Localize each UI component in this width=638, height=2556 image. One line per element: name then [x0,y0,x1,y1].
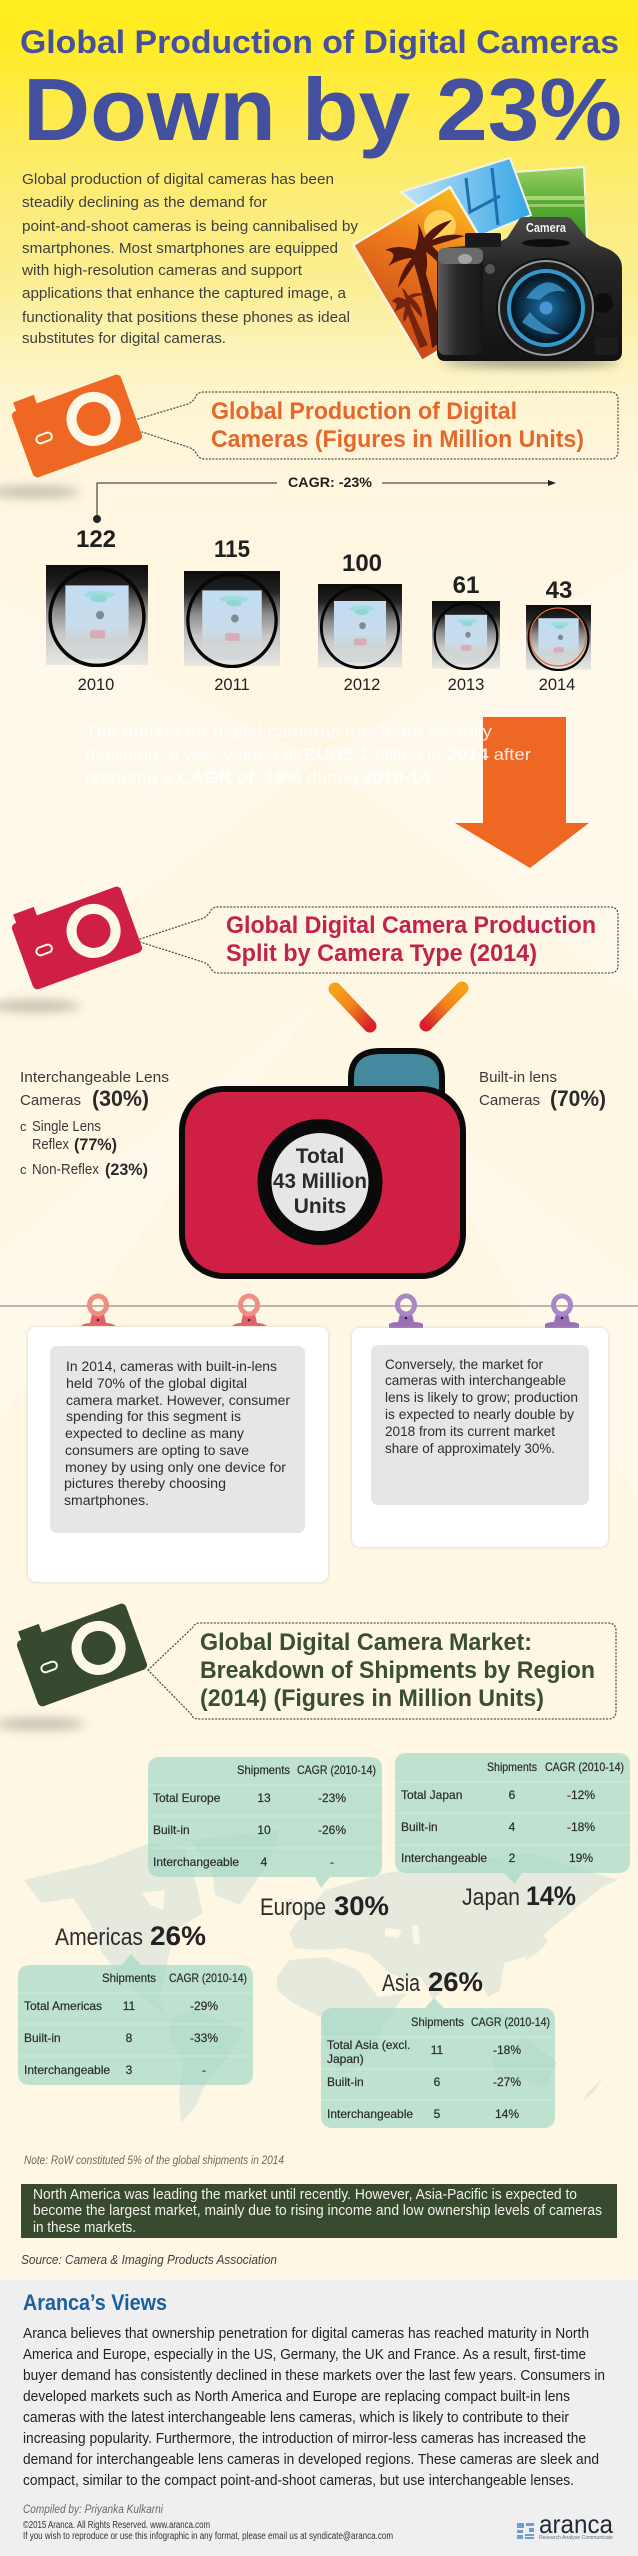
table: Japan: Built-in [401,1820,438,1834]
table: Europe: CAGR (2010-14) [297,1763,376,1777]
interchangeable lens label: (77%) [74,1136,117,1154]
intro paragraph [21,171,358,347]
bar chart: production by year [46,526,591,694]
illustration: photos and DSLR camera: Camera [526,220,567,235]
section 3 heading callout [148,1623,616,1719]
table: Europe: Shipments [237,1763,290,1777]
table: Japan: Total Japan [401,1788,462,1802]
table: Asia: -27% [493,2075,521,2089]
table: Europe: -26% [318,1823,346,1837]
2010 bar: 122 [76,526,116,553]
big orange down arrow [455,717,589,868]
dark green callout: become the largest market, mainly due to rising income and low ownership levels of cameras [33,2203,602,2219]
region label: Japan: Japan [462,1884,520,1911]
2014 bar [526,577,591,694]
Aranca's Views heading: Aranca’s Views [23,2290,167,2315]
table: Asia: CAGR (2010-14) [471,2015,550,2029]
dark green callout [21,2184,617,2238]
dark green callout: in these markets. [33,2220,136,2236]
camera graphic with total [182,1051,463,1276]
table: Asia: Interchangeable [327,2107,413,2121]
2013 bar: 2013 [448,676,484,694]
interchangeable lens label: Non-Reflex [32,1162,100,1178]
intro paragraph: smartphones. Most smartphones are equipped [22,240,338,257]
built-in lens label [479,1069,606,1111]
section 2 heading callout: Global Digital Camera Production [226,912,596,939]
section 1 heading callout: Cameras (Figures in Million Units) [211,426,584,453]
table: Japan: 4 [509,1820,516,1834]
table: Europe: 13 [257,1791,271,1805]
region label: Europe: Europe [260,1894,326,1921]
note card: interchangeable lens: is expected to nearly double by [385,1406,574,1422]
table: Americas: - [202,2063,206,2077]
note card: built-in lens: pictures thereby choosing [64,1475,226,1491]
2012 bar [318,550,402,694]
interchangeable lens label [20,1069,169,1179]
table: Europe: 10 [257,1823,271,1837]
note card: built-in lens: consumers are opting to save [65,1442,249,1458]
clips: pink [81,1296,267,1326]
aranca logo: Research Analyse Communicate [539,2535,613,2541]
table: Americas: -33% [190,2031,218,2045]
section 3 icon: green camera [0,1594,148,1730]
note card: built-in lens: money by using only one device for [65,1459,286,1475]
table: Japan: 6 [509,1788,516,1802]
table: Asia: Built-in [327,2075,364,2089]
source: Source: Camera & Imaging Products Association [21,2252,277,2267]
compiled by: Compiled by: Priyanka Kulkarni [23,2502,163,2516]
interchangeable lens label: Interchangeable Lens [20,1069,169,1086]
table: Asia: Total Asia (excl. [327,2038,410,2052]
table: Japan [395,1753,630,1884]
table: Asia: -18% [493,2043,521,2057]
table: Asia [321,1998,555,2128]
note card: built-in lens [28,1327,328,1582]
CAGR arrow: CAGR: -23% [288,474,373,490]
table: Americas: 3 [126,2063,133,2077]
intro paragraph: with high-resolution cameras and support [21,262,303,279]
title: Down by 23% [23,60,622,159]
table: Japan: Shipments [487,1760,537,1774]
section 1 heading callout: Global Production of Digital [211,398,517,425]
note card: built-in lens: held 70% of the global digital [66,1375,247,1391]
Aranca's Views body [23,2326,605,2489]
section 3 heading callout: (2014) (Figures in Million Units) [200,1685,544,1712]
built-in lens label: (70%) [550,1086,606,1111]
interchangeable lens label: (30%) [92,1086,149,1111]
table: Americas [18,1954,253,2085]
intro paragraph: functionality that positions these phones as ideal [22,309,350,326]
table: Americas: -29% [190,1999,218,2013]
table: Europe: Built-in [153,1823,190,1837]
intro paragraph: Global production of digital cameras has been [22,171,334,188]
table: Asia: Shipments [411,2015,464,2029]
table: Japan: 19% [569,1851,593,1865]
interchangeable lens label: c [20,1162,27,1177]
table: Japan: 2 [509,1851,516,1865]
2013 bar: 61 [453,572,479,599]
Aranca's Views body: Aranca believes that ownership penetration for digital cameras has reached maturity in North [23,2326,589,2342]
2013 bar [432,572,500,694]
intro paragraph: substitutes for digital cameras. [22,330,226,347]
CAGR arrow [93,474,556,523]
interchangeable lens label: c [20,1119,27,1134]
table: Europe: Interchangeable [153,1855,239,1869]
title [20,24,622,159]
aranca logo: aranca [539,2509,614,2539]
clips: purple [389,1296,579,1328]
map note: Note: RoW constituted 5% of the global shipments in 2014 [24,2153,284,2167]
note card: built-in lens: smartphones. [64,1492,149,1508]
camera graphic with total: 43 Million [273,1170,367,1193]
built-in lens label: Built-in lens [479,1069,557,1086]
region label: Japan: 14% [526,1881,576,1911]
table: Asia: 5 [434,2107,441,2121]
note card: built-in lens: spending for this segment is [66,1408,241,1424]
note card: interchangeable lens: share of approximately 30%. [385,1440,555,1456]
copyright [23,2520,393,2542]
Aranca's Views body: compact, similar to the compact point-and-shoot cameras, but use interchangeable lenses. [23,2473,574,2489]
table: Americas: 11 [123,1999,136,2013]
table: Asia: 6 [434,2075,441,2089]
note card: interchangeable lens: 2018 from its current market [385,1423,555,1439]
Aranca's Views body: increasing popularity. Furthermore, the introduction of mirror-less cameras has increased the [23,2431,586,2447]
note card: interchangeable lens: lens is likely to grow; production [385,1389,578,1405]
table: Americas: Total Americas [24,1999,102,2013]
section 2 heading callout [140,907,618,973]
table: Europe [148,1757,382,1888]
note card: interchangeable lens: Conversely, the market for [385,1356,543,1372]
2012 bar: 2012 [344,676,380,694]
copyright: If you wish to reproduce or use this infographic in any format, please email us at syndicate@aranca.com [23,2531,393,2542]
table: Europe: Total Europe [153,1791,221,1805]
section 3 heading callout: Breakdown of Shipments by Region [200,1657,595,1684]
section 3 heading callout: Global Digital Camera Market: [200,1629,532,1656]
note card: built-in lens: expected to decline as many [65,1425,244,1441]
camera graphic with total: Total [296,1145,344,1168]
2011 bar: 2011 [214,676,250,694]
table: Europe: - [330,1855,334,1869]
world map [24,1830,618,2123]
Aranca's Views body: demand for interchangeable lens cameras in developed regions. These cameras are sleek and [23,2452,599,2468]
section 2 icon: crimson camera [0,877,143,1012]
table: Europe: -23% [318,1791,346,1805]
faint white market note: reporting a CAGR of -19% during 2010-14. [85,768,435,787]
region label: Europe [260,1891,389,1921]
2010 bar: 2010 [78,676,114,694]
region label: Japan [462,1881,576,1911]
Aranca's Views body: developed markets such as North America and Europe are replacing compact built-in lens [23,2389,570,2405]
table: Asia: 14% [495,2107,519,2121]
table: Europe: 4 [261,1855,268,1869]
2010 bar [46,526,148,694]
section 2 heading callout: Split by Camera Type (2014) [226,940,537,967]
region label: Americas: Americas [55,1924,143,1951]
note card: interchangeable lens: cameras with interchangeable [385,1372,566,1388]
table: Americas: Shipments [102,1971,156,1985]
table: Asia: Japan) [327,2052,364,2066]
table: Japan: Interchangeable [401,1851,487,1865]
note card: built-in lens: In 2014, cameras with built-in-lens [66,1358,277,1374]
table: Americas: 8 [126,2031,133,2045]
aranca logo [517,2509,614,2541]
intro paragraph: point-and-shoot cameras is being cannibalised by [22,218,358,235]
2014 bar: 43 [546,577,572,604]
2014 bar: 2014 [539,676,575,694]
copyright: ©2015 Aranca. All Rights Reserved. www.aranca.com [23,2520,210,2531]
intro paragraph: steadily declining as the demand for [22,194,267,211]
region label: Europe: 30% [334,1891,389,1921]
note card: built-in lens: camera market. However, consumer [66,1392,290,1408]
interchangeable lens label: (23%) [105,1161,148,1179]
region label: Asia: 26% [428,1967,483,1997]
2011 bar: 115 [214,536,250,563]
2012 bar: 100 [342,550,382,577]
region label: Americas: 26% [150,1921,206,1951]
region label: Asia [382,1967,483,1997]
faint white market note: declining. It was valued at EUR5.1 billion in 2014 after [85,745,531,764]
region label: Asia: Asia [382,1970,421,1997]
faint white market note: The market for digital cameras has been steadily [85,722,493,741]
built-in lens label: Cameras [479,1092,540,1109]
table: Japan: CAGR (2010-14) [545,1760,624,1774]
table: Asia: 11 [431,2043,444,2057]
illustration: photos and DSLR camera [353,158,622,367]
intro paragraph: applications that enhance the captured image, a [22,285,347,302]
section 1 icon: orange camera [0,365,143,498]
region label: Americas [55,1921,206,1951]
table: Japan: -18% [567,1820,595,1834]
table: Americas: CAGR (2010-14) [169,1971,247,1985]
Aranca's Views body: cameras with the latest interchangeable lens cameras, which is likely to contribute to their [23,2410,569,2426]
interchangeable lens label: Cameras [20,1092,81,1109]
note card: interchangeable lens [352,1328,608,1547]
dark green callout: North America was leading the market until recently. However, Asia-Pacific is expected to [33,2187,577,2203]
Aranca's Views body: buyer demand has consistently declined in these markets over the last few years. Consumers in [23,2368,605,2384]
flash lines [335,988,462,1026]
interchangeable lens label: Reflex [32,1137,70,1153]
2011 bar [184,536,280,694]
camera graphic with total: Units [294,1195,346,1218]
interchangeable lens label: Single Lens [32,1119,101,1135]
section 1 heading callout [138,392,618,459]
title: Global Production of Digital Cameras [20,24,619,60]
table: Japan: -12% [567,1788,595,1802]
table: Americas: Built-in [24,2031,61,2045]
faint white market note [85,722,531,787]
table: Americas: Interchangeable [24,2063,110,2077]
Aranca's Views body: America and Europe, especially in the US, Germany, the UK and France. As a result, first-time [23,2347,586,2363]
